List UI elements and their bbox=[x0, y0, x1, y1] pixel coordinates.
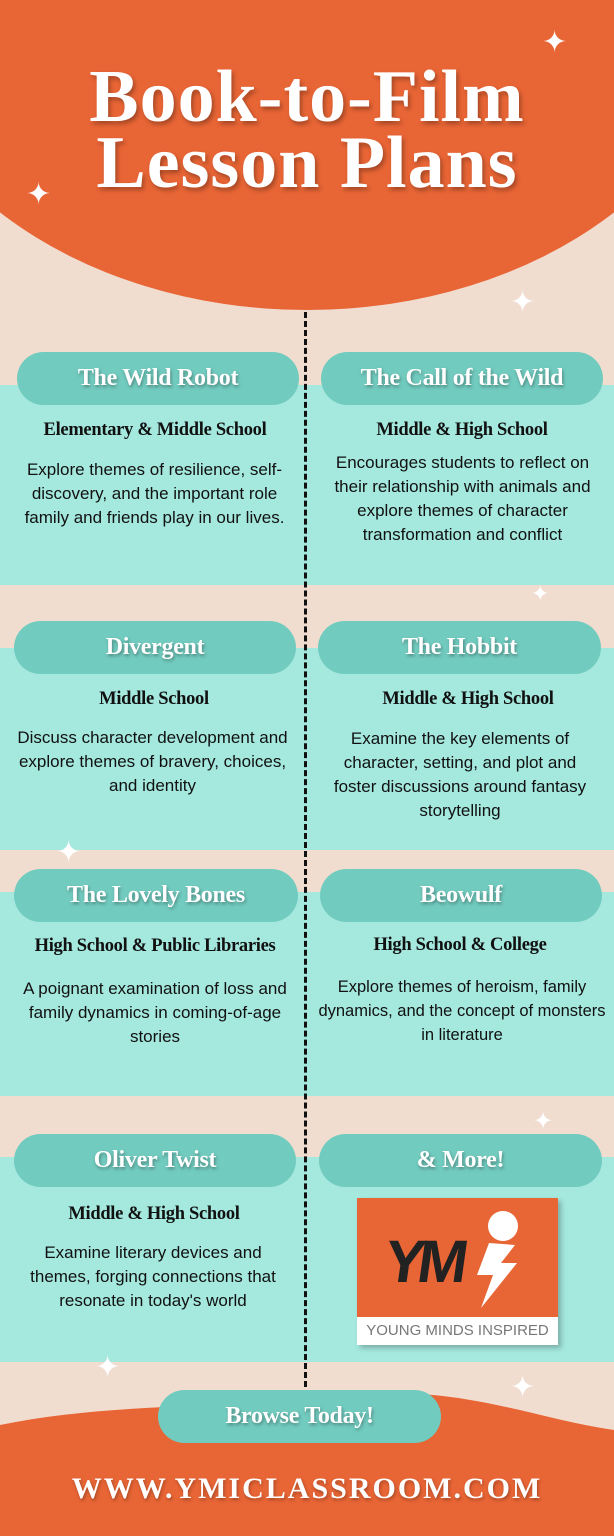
stars: ✦ bbox=[533, 1108, 553, 1135]
panel: The Wild Robot: The Wild Robot bbox=[78, 365, 238, 391]
panel: The Hobbit bbox=[318, 621, 601, 820]
url: WWW.YMICLASSROOM.COM bbox=[72, 1472, 542, 1505]
title: Book-to-Film bbox=[89, 56, 525, 138]
footer orange wave bbox=[0, 1394, 614, 1536]
panel: The Lovely Bones bbox=[14, 869, 298, 1046]
panel: The Call of the Wild: Middle & High School bbox=[376, 420, 548, 440]
title bbox=[89, 56, 526, 204]
header orange shape bbox=[0, 0, 614, 310]
panel: The Wild Robot: Elementary & Middle School bbox=[44, 420, 266, 440]
panel: The Call of the Wild: The Call of the Wild bbox=[361, 365, 563, 391]
panel: The Call of the Wild: Encourages students to reflect on their relationship with animals and explore themes of character transformation and conflict bbox=[334, 453, 591, 544]
panel: Divergent: Middle School bbox=[99, 689, 209, 709]
panel: The Lovely Bones: The Lovely Bones bbox=[67, 882, 245, 908]
panel: Oliver Twist: Middle & High School bbox=[68, 1204, 240, 1224]
panel: Oliver Twist bbox=[14, 1134, 296, 1310]
panel: The Wild Robot: Explore themes of resilience, self-discovery, and the important role family and friends play in our lives. bbox=[25, 460, 284, 527]
stars: ✦ bbox=[531, 581, 549, 606]
browse button bbox=[158, 1390, 441, 1443]
stars: ✦ bbox=[510, 1371, 535, 1404]
title: Lesson Plans bbox=[96, 122, 518, 204]
stars: ✦ bbox=[56, 836, 81, 869]
logo: YMI: YM bbox=[380, 1228, 466, 1295]
panel: Beowulf: High School & College bbox=[373, 935, 547, 955]
divider dashed line bbox=[304, 312, 307, 1387]
panel: Beowulf: Beowulf bbox=[420, 882, 502, 908]
panel: & More with logo bbox=[319, 1134, 602, 1351]
panel: Beowulf bbox=[318, 869, 606, 1044]
stars: ✦ bbox=[542, 26, 567, 59]
panel: The Lovely Bones: A poignant examination of loss and family dynamics in coming-of-age stories bbox=[23, 979, 287, 1046]
stars: ✦ bbox=[26, 178, 51, 211]
panel: The Hobbit: The Hobbit bbox=[402, 634, 517, 660]
panel: The Wild Robot bbox=[17, 352, 299, 527]
stars: ✦ bbox=[95, 1351, 120, 1384]
logo: YMI bbox=[357, 1198, 558, 1345]
panel: The Lovely Bones: High School & Public Libraries bbox=[35, 936, 275, 956]
panel: & More with logo: & More! bbox=[417, 1147, 504, 1173]
panel: Beowulf: Explore themes of heroism, family dynamics, and the concept of monsters in literature bbox=[318, 978, 606, 1044]
logo: YMI: YOUNG MINDS INSPIRED bbox=[366, 1322, 549, 1339]
panel: Divergent: Discuss character development and explore themes of bravery, choices, and identity bbox=[17, 728, 288, 795]
stars: ✦ bbox=[510, 286, 535, 319]
panel: The Hobbit: Examine the key elements of character, setting, and plot and foster discussions around fantasy storytelling bbox=[334, 729, 586, 820]
panel: The Hobbit: Middle & High School bbox=[382, 689, 554, 709]
panel: Divergent: Divergent bbox=[106, 634, 204, 660]
panel: The Call of the Wild bbox=[321, 352, 603, 544]
panel: Oliver Twist: Oliver Twist bbox=[94, 1147, 216, 1173]
browse button: Browse Today! bbox=[225, 1403, 374, 1429]
panel: Divergent bbox=[14, 621, 296, 795]
panel: Oliver Twist: Examine literary devices and themes, forging connections that resonate in today's world bbox=[30, 1243, 276, 1310]
teal bands bbox=[0, 385, 614, 585]
